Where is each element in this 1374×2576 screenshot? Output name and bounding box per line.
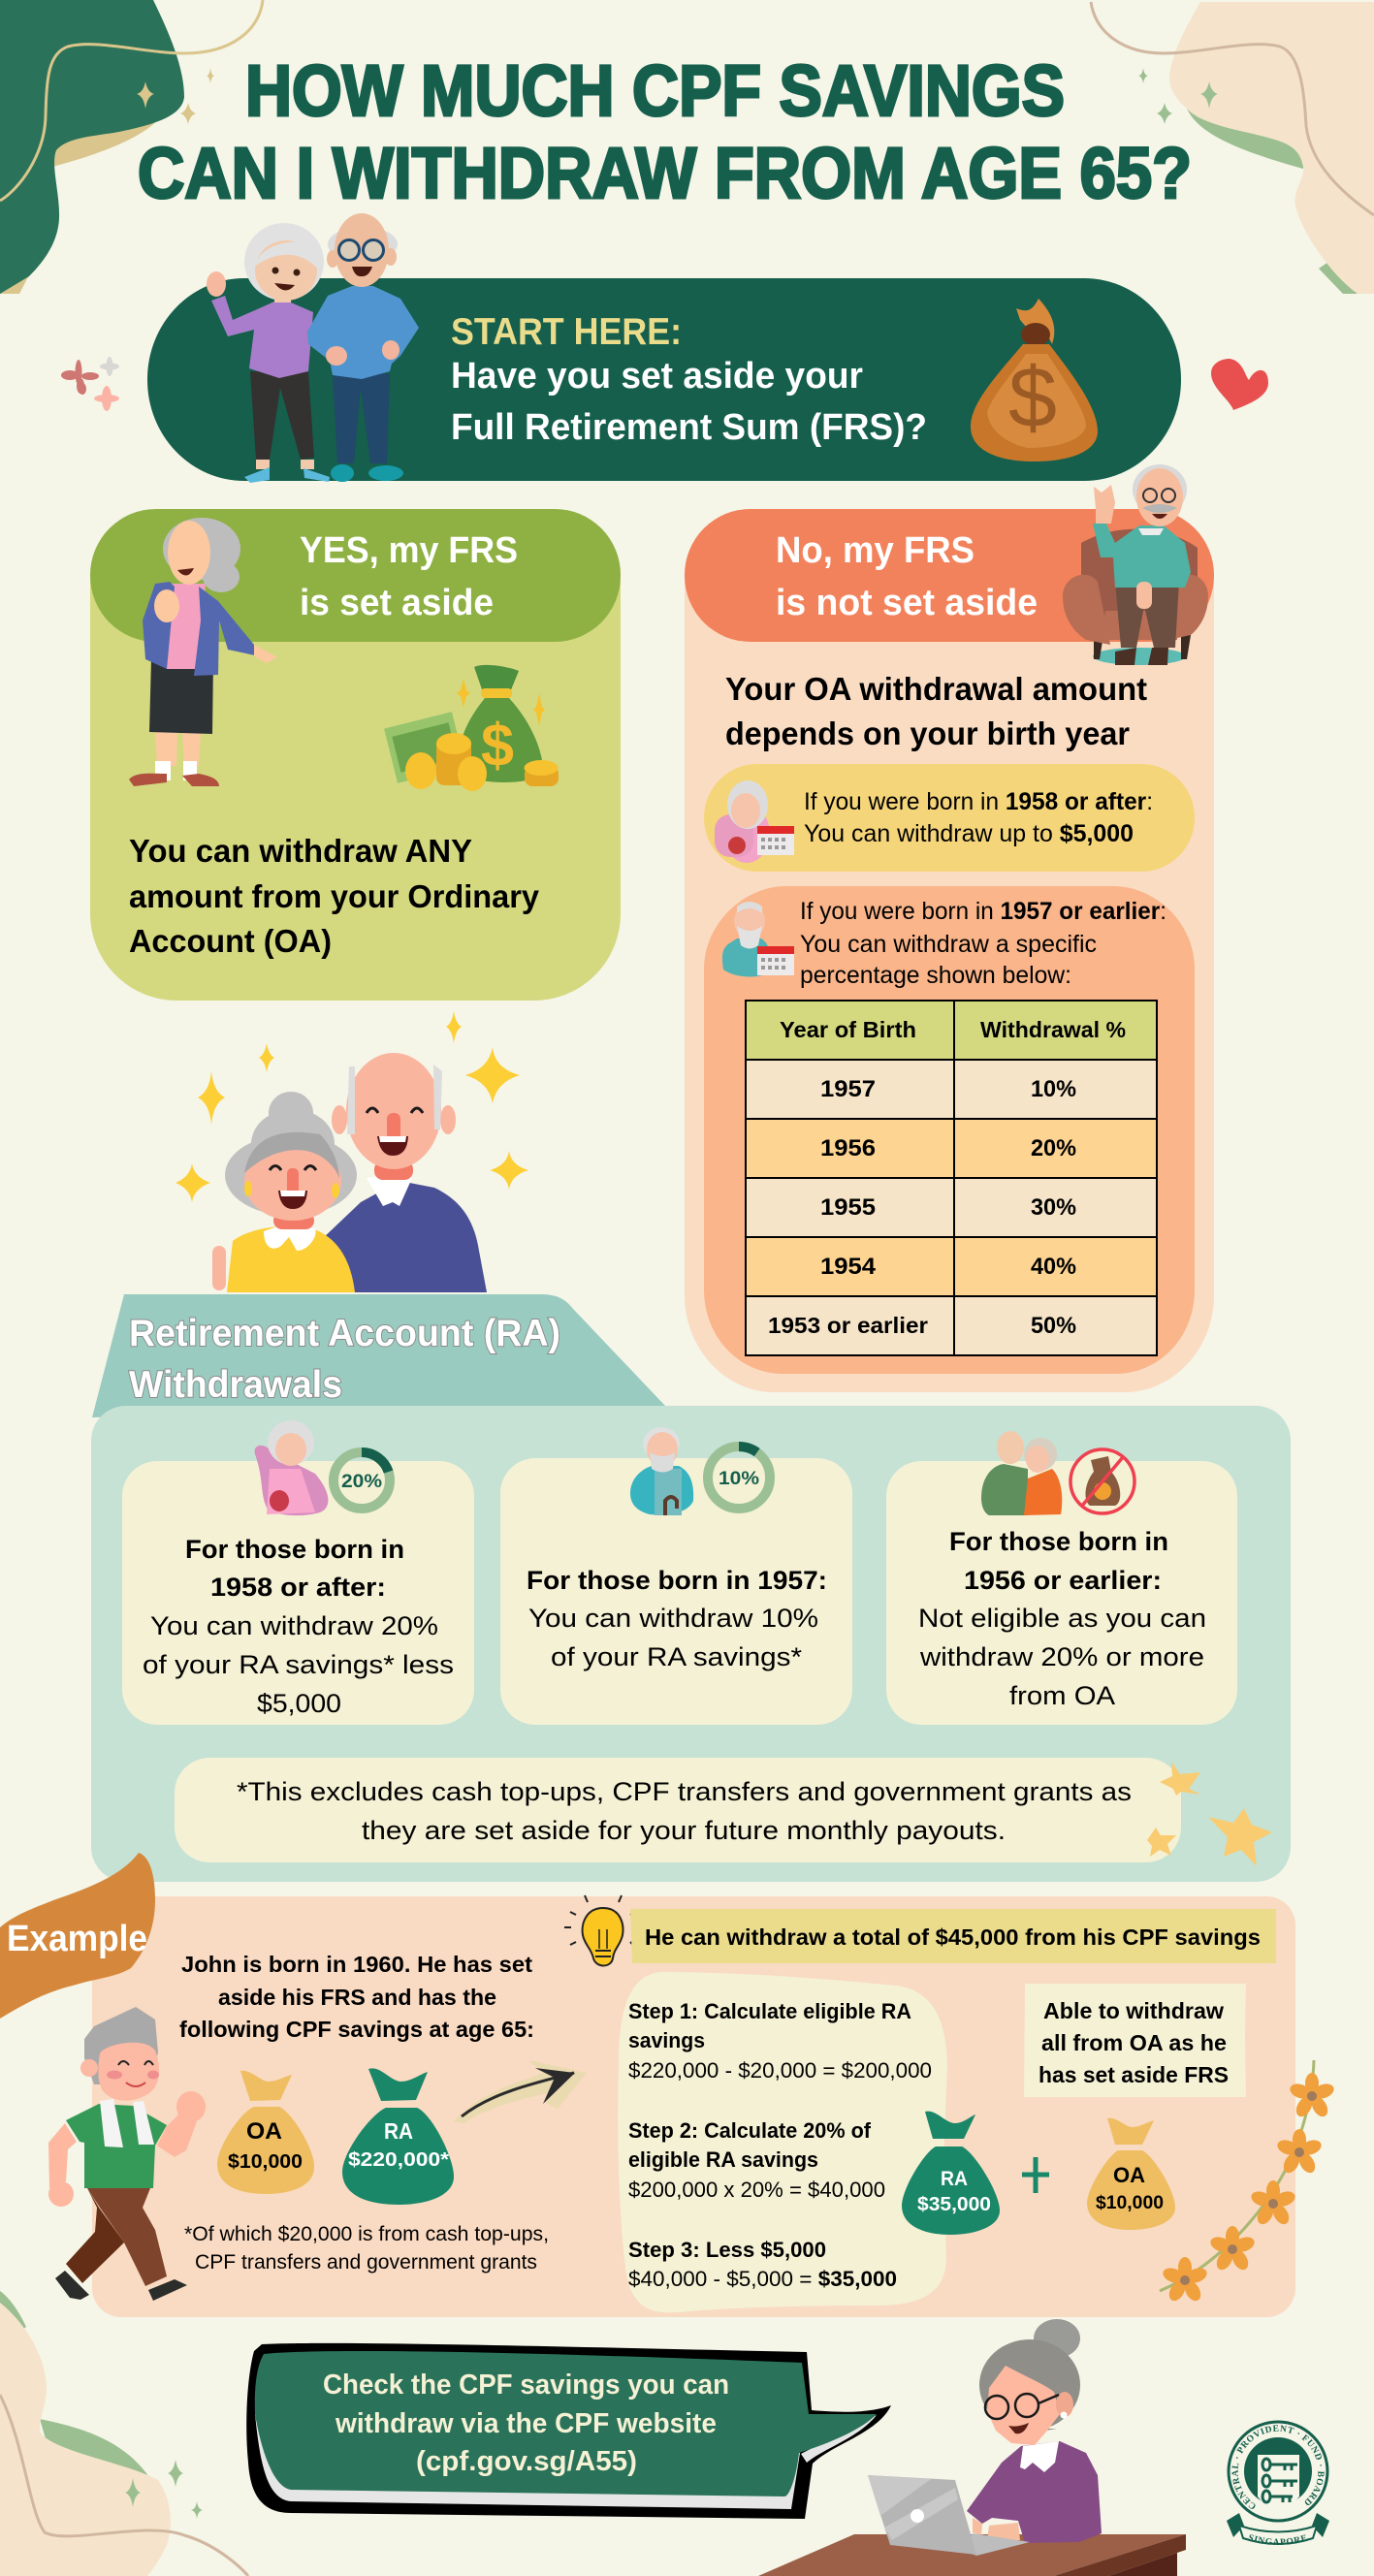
example tab bbox=[0, 1853, 155, 2019]
steps box: $220,000 - $20,000 = $200,000 bbox=[628, 2058, 932, 2083]
callout text: Check the CPF savings you can bbox=[323, 2369, 729, 2401]
start here text: Full Retirement Sum (FRS)? bbox=[451, 407, 927, 448]
example intro text: following CPF savings at age 65: bbox=[179, 2017, 534, 2042]
steps box: $40,000 - $5,000 = $35,000 bbox=[628, 2267, 897, 2291]
example intro text: John is born in 1960. He has set bbox=[181, 1952, 532, 1977]
woman bbox=[212, 1092, 357, 1292]
speech bubble callout bbox=[246, 2343, 891, 2519]
hands bbox=[973, 2518, 1020, 2540]
title: CAN I WITHDRAW FROM AGE 65? bbox=[138, 133, 1192, 213]
icon: RA 35,000 bag: RA bbox=[941, 2168, 968, 2190]
OA depends text: Your OA withdrawal amount bbox=[725, 671, 1147, 707]
steps box: Step 2: Calculate 20% of bbox=[628, 2118, 871, 2143]
footnote box: they are set aside for your future monthly payouts. bbox=[362, 1816, 1006, 1845]
steps box: $200,000 x 20% = $40,000 bbox=[628, 2178, 885, 2202]
arrow to steps bbox=[454, 2060, 587, 2123]
yellow pill: born 1958 or after bbox=[704, 764, 1195, 872]
RA tab heading: Retirement Account (RA) bbox=[129, 1313, 560, 1354]
yes body text: amount from your Ordinary bbox=[129, 878, 540, 914]
icon: OA 10,000 bag: $10,000 bbox=[1096, 2193, 1164, 2213]
RA tab heading: Withdrawals bbox=[129, 1364, 342, 1406]
footnote box bbox=[175, 1758, 1181, 1862]
example footnote: CPF transfers and government grants bbox=[195, 2251, 537, 2274]
card: born 1958 or after: You can withdraw 20% bbox=[150, 1611, 438, 1640]
title: HOW MUCH CPF SAVINGS bbox=[245, 50, 1065, 131]
table: withdrawal percentage by year of birth: 50% bbox=[1031, 1313, 1076, 1339]
panel: no FRS not set aside bbox=[685, 509, 1214, 1392]
panel: RA withdrawals heading tab bbox=[92, 1294, 665, 1417]
yes heading bbox=[300, 530, 518, 623]
card: born 1958 or after: of your RA savings* less bbox=[143, 1650, 454, 1679]
man bbox=[312, 1053, 487, 1292]
card: born 1956 or earlier: from OA bbox=[1009, 1681, 1115, 1710]
icon: grandmother pointing bbox=[129, 518, 277, 786]
no heading: is not set aside bbox=[776, 583, 1038, 623]
able to withdraw note: has set aside FRS bbox=[1038, 2062, 1229, 2087]
icon: orange money bag: $ bbox=[1008, 349, 1057, 445]
footnote box: *This excludes cash top-ups, CPF transfers and government grants as bbox=[237, 1777, 1132, 1806]
icon: plus sign bbox=[1022, 2157, 1049, 2193]
icon: couple with crossed-out money bag bbox=[981, 1431, 1134, 1515]
icon: OA 10,000 bag bbox=[1087, 2118, 1175, 2230]
CPF board logo bbox=[1227, 2420, 1329, 2545]
woman bbox=[207, 223, 330, 483]
table: withdrawal percentage by year of birth: 20% bbox=[1031, 1135, 1076, 1161]
orange panel: born 1957 or earlier: If you were born in 1957 or earlier: bbox=[800, 898, 1166, 925]
example intro text: aside his FRS and has the bbox=[218, 1985, 496, 2010]
body bbox=[967, 2441, 1102, 2543]
icon: RA money bag bbox=[342, 2068, 454, 2205]
card: born in 1957: For those born in 1957: bbox=[527, 1566, 827, 1595]
yellow pill: born 1958 or after: You can withdraw up to $5,000 bbox=[804, 820, 1134, 847]
top-right decorative blob bbox=[1091, 2, 1374, 294]
icon: laughing couple bbox=[212, 1053, 487, 1292]
yes heading: YES, my FRS bbox=[300, 530, 518, 571]
icon: man with 10% ring bbox=[630, 1427, 770, 1515]
CPF board logo: CENTRAL · PROVIDENT · FUND · BOARD bbox=[1231, 2425, 1325, 2509]
card: born in 1957: You can withdraw 10% bbox=[528, 1604, 818, 1633]
table: withdrawal percentage by year of birth: 30% bbox=[1031, 1194, 1076, 1221]
callout text: withdraw via the CPF website bbox=[335, 2408, 717, 2439]
collar bbox=[1020, 2441, 1059, 2472]
example intro text bbox=[179, 1952, 534, 2042]
steps box bbox=[618, 1972, 947, 2312]
icon: happy elderly couple bbox=[207, 213, 419, 483]
card: born in 1957: of your RA savings* bbox=[551, 1642, 803, 1671]
total withdrawal banner: He can withdraw a total of $45,000 from his CPF savings bbox=[645, 1924, 1261, 1950]
table: withdrawal percentage by year of birth: 10% bbox=[1031, 1076, 1076, 1102]
example footnote bbox=[184, 2223, 549, 2274]
icon: RA money bag: RA bbox=[384, 2118, 413, 2144]
icon: woman with 20% ring: 20% bbox=[341, 1472, 382, 1492]
card: born 1958 or after: For those born in bbox=[185, 1535, 404, 1564]
steps box: eligible RA savings bbox=[628, 2147, 818, 2172]
table: withdrawal percentage by year of birth: 1954 bbox=[820, 1254, 877, 1280]
card: born 1956 or earlier bbox=[886, 1461, 1237, 1725]
card: born 1956 or earlier: Not eligible as you can bbox=[918, 1604, 1206, 1633]
icon: woman with 20% ring bbox=[255, 1420, 390, 1515]
card: born 1958 or after: $5,000 bbox=[257, 1689, 341, 1718]
total withdrawal banner bbox=[630, 1909, 1276, 1963]
card: born 1956 or earlier: For those born in bbox=[949, 1527, 1168, 1556]
icon: grandfather with calendar bbox=[722, 902, 794, 976]
icon: light bulb bbox=[564, 1895, 640, 1966]
CPF board logo: SINGAPORE bbox=[1249, 2534, 1307, 2545]
face bbox=[987, 2366, 1060, 2445]
icon: OA money bag: OA bbox=[246, 2118, 282, 2145]
icon: money bag with cash and coins bbox=[384, 665, 559, 791]
steps box: savings bbox=[628, 2028, 705, 2052]
orange panel: born 1957 or earlier bbox=[704, 886, 1195, 1374]
callout text: (cpf.gov.sg/A55) bbox=[416, 2446, 637, 2477]
RA tab heading bbox=[129, 1313, 560, 1406]
icon: man in armchair waving bbox=[1063, 464, 1208, 665]
steps box: Step 1: Calculate eligible RA bbox=[628, 1999, 911, 2023]
table: withdrawal percentage by year of birth: Withdrawal % bbox=[980, 1017, 1126, 1042]
panel: yes FRS set aside bbox=[90, 509, 621, 1001]
orange panel: born 1957 or earlier: percentage shown below: bbox=[800, 962, 1071, 989]
icon: yellow sparkles bbox=[176, 1011, 528, 1202]
yes body text: You can withdraw ANY bbox=[129, 833, 472, 869]
OA depends text bbox=[725, 671, 1147, 751]
card: born 1958 or after bbox=[122, 1461, 474, 1725]
yellow pill: born 1958 or after: If you were born in 1958 or after: bbox=[804, 788, 1153, 815]
steps box: Step 3: Less $5,000 bbox=[628, 2238, 826, 2262]
laptop bbox=[868, 2475, 1030, 2556]
icon: RA 35,000 bag bbox=[902, 2112, 1000, 2235]
panel: example bbox=[92, 1895, 1336, 2317]
yes header pill bbox=[90, 509, 621, 642]
icon: grandmother with calendar bbox=[715, 780, 794, 863]
table: withdrawal percentage by year of birth: Year of Birth bbox=[780, 1017, 916, 1042]
table: withdrawal percentage by year of birth bbox=[746, 1001, 1157, 1355]
card: born 1956 or earlier: 1956 or earlier: bbox=[964, 1566, 1162, 1595]
icon: heart bbox=[1211, 359, 1268, 410]
start here text: Have you set aside your bbox=[451, 356, 863, 397]
panel: RA withdrawals bbox=[91, 1406, 1291, 1882]
man bbox=[307, 213, 419, 482]
icon: OA money bag: $10,000 bbox=[228, 2151, 303, 2173]
able to withdraw note bbox=[1024, 1984, 1246, 2097]
example tab: Example bbox=[7, 1919, 147, 1959]
icon: flowers bbox=[61, 357, 119, 411]
icon: OA money bag bbox=[217, 2071, 314, 2194]
icon: orange money bag bbox=[971, 299, 1098, 461]
icon: RA money bag: $220,000* bbox=[348, 2149, 449, 2171]
yes heading: is set aside bbox=[300, 583, 494, 623]
hair and bun bbox=[1034, 2319, 1080, 2358]
OA depends text: depends on your birth year bbox=[725, 716, 1130, 751]
top-left decorative blob bbox=[0, 0, 263, 294]
desk bbox=[758, 2534, 1186, 2576]
icon: walking man bbox=[48, 2007, 206, 2301]
icon: money bag with cash and coins: $ bbox=[481, 713, 514, 779]
no heading: No, my FRS bbox=[776, 530, 975, 571]
table: withdrawal percentage by year of birth: 1953 or earlier bbox=[768, 1313, 928, 1338]
orange panel: born 1957 or earlier: You can withdraw a specific bbox=[800, 931, 1097, 958]
callout text bbox=[323, 2369, 729, 2477]
table: withdrawal percentage by year of birth: 1956 bbox=[820, 1135, 876, 1161]
start here text bbox=[451, 311, 927, 448]
icon: flowering branch bbox=[1160, 2060, 1336, 2304]
yes body text: Account (OA) bbox=[129, 923, 332, 959]
icon: man with 10% ring: 10% bbox=[719, 1469, 759, 1489]
card: born 1956 or earlier: withdraw 20% or more bbox=[919, 1642, 1204, 1671]
able to withdraw note: all from OA as he bbox=[1041, 2030, 1227, 2055]
no heading bbox=[776, 530, 1038, 623]
card: born 1958 or after: 1958 or after: bbox=[210, 1573, 386, 1602]
bottom-left decorative blob bbox=[0, 2291, 248, 2576]
icon: stars bbox=[1147, 1762, 1272, 1866]
icon: grandmother at laptop bbox=[758, 2319, 1186, 2576]
yes body text bbox=[129, 833, 540, 959]
icon: OA 10,000 bag: OA bbox=[1113, 2163, 1145, 2187]
icon: RA 35,000 bag: $35,000 bbox=[917, 2194, 991, 2215]
no header pill bbox=[685, 509, 1214, 642]
example footnote: *Of which $20,000 is from cash top-ups, bbox=[184, 2223, 549, 2245]
card: born in 1957 bbox=[500, 1458, 852, 1725]
start here pill bbox=[147, 278, 1181, 481]
start here text: START HERE: bbox=[451, 311, 682, 353]
title bbox=[138, 50, 1192, 213]
table: withdrawal percentage by year of birth: 1955 bbox=[820, 1194, 876, 1221]
table: withdrawal percentage by year of birth: 1957 bbox=[820, 1076, 876, 1102]
table: withdrawal percentage by year of birth: 40% bbox=[1031, 1254, 1076, 1280]
able to withdraw note: Able to withdraw bbox=[1043, 1998, 1224, 2023]
